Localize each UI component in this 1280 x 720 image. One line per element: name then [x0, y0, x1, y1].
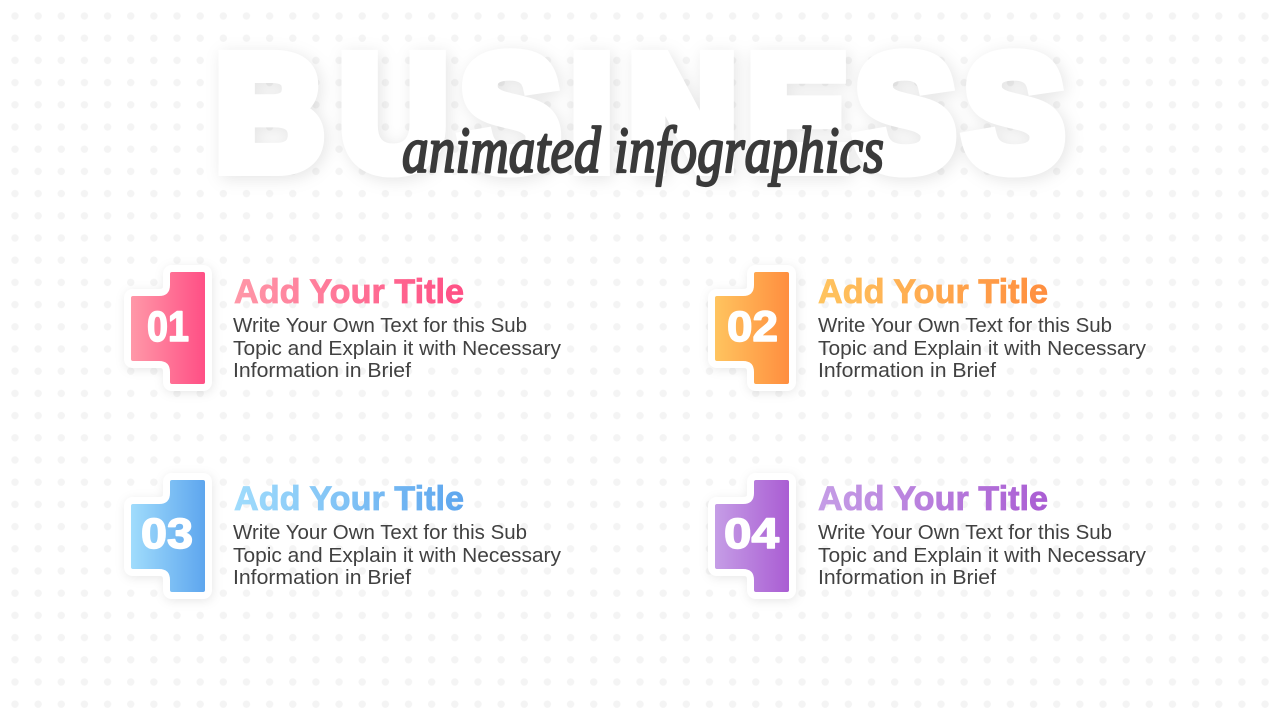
- text block: item 03: Information in Brief: [233, 566, 411, 589]
- badge: 04: 04: [724, 510, 779, 558]
- badge: 02: 02: [727, 303, 778, 351]
- text block: item 04: Information in Brief: [818, 566, 996, 589]
- panel: item 03: [131, 480, 562, 592]
- text block: item 01: Write Your Own Text for this Sub: [233, 314, 527, 337]
- badge: 02: [715, 272, 789, 384]
- text block: item 01: Topic and Explain it with Necessary: [233, 337, 562, 360]
- text block: item 02: [818, 314, 1147, 382]
- text block: item 04: Write Your Own Text for this Sub: [818, 521, 1112, 544]
- title: item 04: Add Your Title: [818, 480, 1048, 518]
- text block: item 03: Topic and Explain it with Necessary: [233, 544, 562, 567]
- heading: BUSINESS background word: BUSINESS: [216, 23, 1064, 202]
- badge: 01: [131, 272, 205, 384]
- text block: item 02: Information in Brief: [818, 359, 996, 382]
- title: item 03: Add Your Title: [234, 480, 464, 518]
- panel: item 01: [131, 272, 562, 384]
- text block: item 02: Write Your Own Text for this Sub: [818, 314, 1112, 337]
- text block: item 01: [233, 314, 562, 382]
- heading: animated infographics script subtitle: animated infographics: [402, 114, 884, 187]
- text block: item 03: [233, 521, 562, 589]
- title: item 02: Add Your Title: [818, 273, 1048, 311]
- text block: item 02: Topic and Explain it with Necessary: [818, 337, 1147, 360]
- text block: item 04: Topic and Explain it with Necessary: [818, 544, 1147, 567]
- badge: 03: [131, 480, 205, 592]
- text block: item 04: [818, 521, 1147, 589]
- panel: item 02: [715, 272, 1147, 384]
- panel: item 04: [715, 480, 1147, 592]
- badge: 01: 01: [147, 303, 189, 351]
- badge: 04: [715, 480, 789, 592]
- text block: item 03: Write Your Own Text for this Sub: [233, 521, 527, 544]
- badge: 03: 03: [141, 510, 193, 558]
- text block: item 01: Information in Brief: [233, 359, 411, 382]
- title: item 01: Add Your Title: [234, 273, 464, 311]
